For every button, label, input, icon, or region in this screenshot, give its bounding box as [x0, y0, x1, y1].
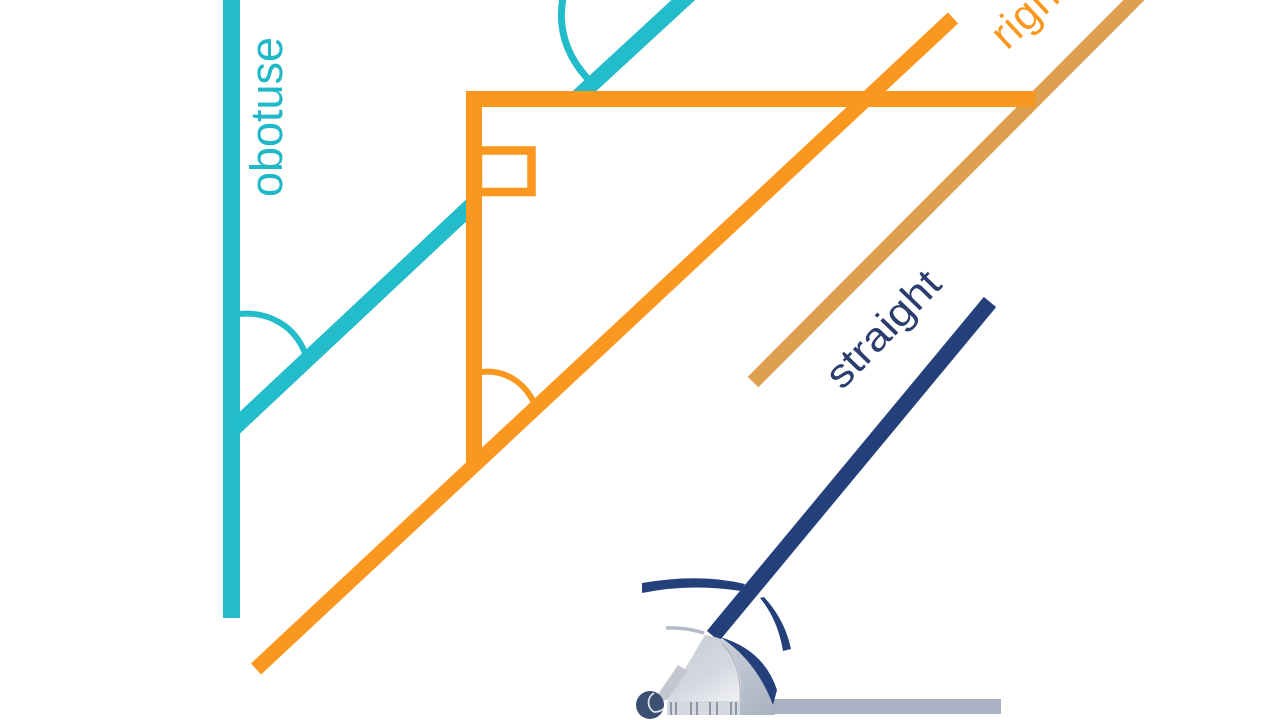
- thin arc top: [666, 628, 704, 633]
- pivot ball: [636, 691, 664, 719]
- label: straight: straight: [817, 262, 950, 397]
- teal angle arc upper: [561, 0, 589, 80]
- inner dome: [668, 635, 741, 702]
- navy right arc: [760, 597, 791, 651]
- straight angle: [642, 262, 990, 651]
- navy diagonal line: [713, 302, 990, 636]
- tan diagonal line: [753, 0, 1146, 382]
- navy crescent: [720, 637, 777, 705]
- right angle marker: [478, 150, 532, 192]
- sector body: [668, 635, 775, 715]
- gray base bar: [770, 699, 1001, 714]
- base teeth: [667, 701, 740, 715]
- right angle: [256, 0, 1079, 669]
- protractor device: [636, 628, 1001, 719]
- teal vertical line: [223, 0, 240, 618]
- obtuse angle: [223, 0, 692, 618]
- teal diagonal line lower: [232, 205, 472, 430]
- gray diagonal band: [652, 665, 688, 703]
- inner dome edge: [722, 644, 740, 702]
- orange long diagonal: [256, 18, 953, 669]
- orange vertical line: [466, 91, 482, 463]
- label: obotuse: obotuse: [241, 37, 292, 197]
- orange angle arc: [481, 372, 534, 403]
- orange horizontal line: [466, 91, 1035, 107]
- navy upper arc: [642, 578, 745, 593]
- teal angle arc lower: [239, 314, 305, 353]
- teal diagonal line upper: [578, 0, 692, 97]
